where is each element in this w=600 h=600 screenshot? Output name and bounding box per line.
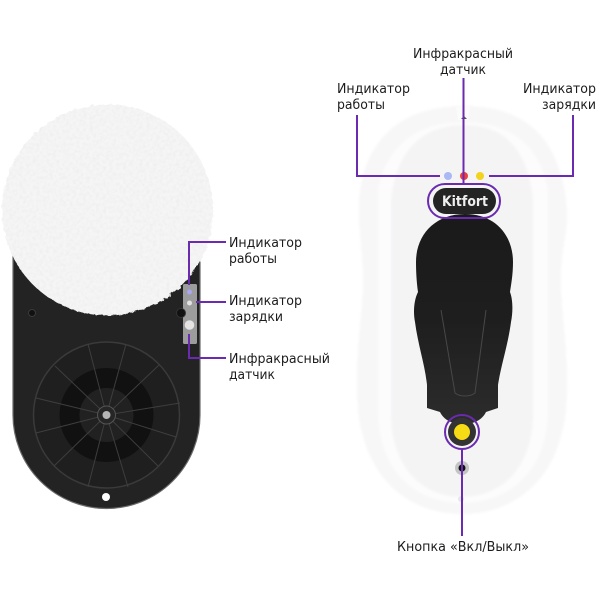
middle band	[378, 122, 548, 503]
label: left infrared sensor: датчик	[229, 367, 275, 383]
label: left work indicator	[229, 235, 302, 267]
black handle	[414, 214, 513, 424]
black body	[13, 250, 200, 508]
bottom hole	[102, 493, 110, 501]
label: top infrared sensor: Инфракрасный	[413, 46, 513, 62]
back view of the robot	[2, 104, 213, 508]
label: power button: Кнопка «Вкл/Выкл»	[397, 539, 529, 555]
label: top infrared sensor: датчик	[440, 62, 486, 78]
label: right charging indicator: зарядки	[542, 97, 596, 113]
fan grille	[34, 342, 180, 488]
charging port	[455, 461, 469, 475]
body screw	[28, 310, 36, 316]
Kitfort logo: Kitfort	[442, 194, 488, 210]
center plate	[391, 125, 533, 497]
outer pads	[357, 106, 567, 514]
bottom marker	[458, 496, 464, 502]
label: right work indicator	[337, 81, 410, 113]
label: left work indicator: Индикатор	[229, 235, 302, 251]
front view of the robot	[357, 106, 567, 514]
cleaning pad	[2, 104, 213, 316]
label: left charging indicator	[229, 293, 302, 325]
LED indicators	[444, 172, 484, 180]
label: left work indicator: работы	[229, 251, 277, 267]
label: right charging indicator: Индикатор	[523, 81, 596, 97]
label: left charging indicator: Индикатор	[229, 293, 302, 309]
top sensor	[456, 107, 470, 120]
label: top infrared sensor	[413, 46, 513, 78]
label: right charging indicator	[523, 81, 596, 113]
label: left infrared sensor: Инфракрасный	[229, 351, 330, 367]
callout lines	[189, 78, 573, 536]
handle groove	[441, 310, 486, 396]
label: left charging indicator: зарядки	[229, 309, 283, 325]
label: right work indicator: работы	[337, 97, 385, 113]
sensor strip	[176, 284, 197, 344]
power button	[448, 418, 476, 446]
label: left infrared sensor	[229, 351, 330, 383]
label: right work indicator: Индикатор	[337, 81, 410, 97]
Kitfort logo	[433, 188, 496, 214]
